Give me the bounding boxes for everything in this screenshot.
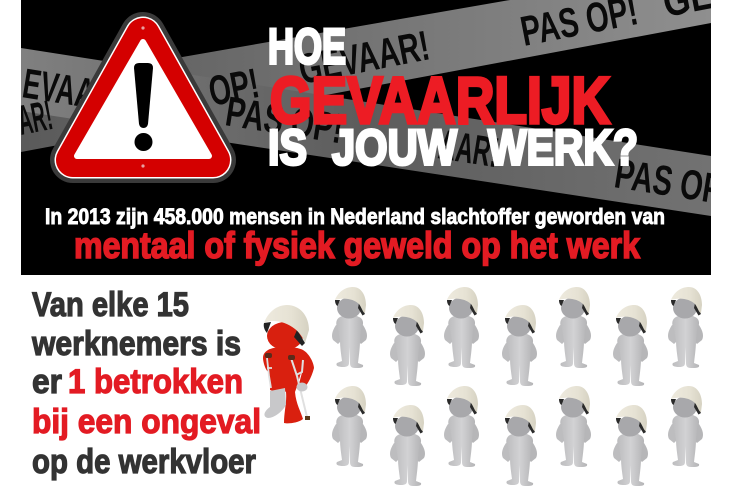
text: red highlight line: mentaal of fysiek geweld op het werk (74, 225, 640, 266)
worker 2 (390, 305, 425, 386)
tape lettering: GEVAAR! (295, 22, 433, 93)
worker 12 (556, 386, 591, 467)
worker 8 (332, 386, 367, 467)
caution tape falling to the right (21, 48, 711, 216)
text block: van elke 15 werknemers: 1 betrokken (68, 363, 243, 401)
worker 9 (390, 405, 425, 486)
text block: van elke 15 werknemers: bij een ongeval (32, 403, 261, 441)
tape lettering: OP! (205, 59, 263, 115)
icon: injured red worker on crutches (263, 305, 314, 423)
worker 1 (332, 287, 367, 368)
title: hoe gevaarlijk is jouw werk: JOUW (332, 120, 458, 176)
title: hoe gevaarlijk is jouw werk: IS (268, 120, 307, 176)
worker 6 (613, 305, 648, 386)
text: intro statistic: In 2013 zijn 458.000 mensen in Nederland slachtoffer geworden van (45, 204, 665, 229)
tape lettering (14, 0, 731, 214)
text block: van elke 15 werknemers: op de werkvloer (32, 443, 256, 481)
panel: black header banner (14, 0, 731, 275)
worker 14 (668, 386, 703, 467)
tape lettering: AAR! (436, 120, 502, 176)
worker 4 (502, 305, 537, 386)
worker 13 (613, 405, 648, 486)
tape lettering: AR! (14, 91, 56, 144)
title: hoe gevaarlijk is jouw werk: HOE (268, 18, 346, 74)
worker 10 (444, 386, 479, 467)
tape lettering: PAS OP! (223, 87, 346, 152)
title: hoe gevaarlijk is jouw werk: GEVAARLIJK (270, 63, 610, 137)
worker 5 (556, 287, 591, 368)
worker 11 (502, 405, 537, 486)
icon: warning triangle (73, 26, 213, 168)
text block: van elke 15 werknemers (31, 286, 261, 481)
tape lettering: EVAA (20, 59, 98, 117)
caution tape rising to the right (21, 0, 711, 152)
text block: van elke 15 werknemers: Van elke 15 (32, 286, 189, 324)
worker 7 (668, 287, 703, 368)
title: hoe gevaarlijk is jouw werk: WERK? (488, 120, 638, 176)
text block: van elke 15 werknemers: werknemers is (31, 325, 241, 363)
text block: van elke 15 werknemers: er (32, 363, 62, 401)
title: hoe gevaarlijk is jouw werk (269, 27, 637, 166)
worker 3 (444, 287, 479, 368)
icon group: grid of grey workers (332, 287, 703, 486)
